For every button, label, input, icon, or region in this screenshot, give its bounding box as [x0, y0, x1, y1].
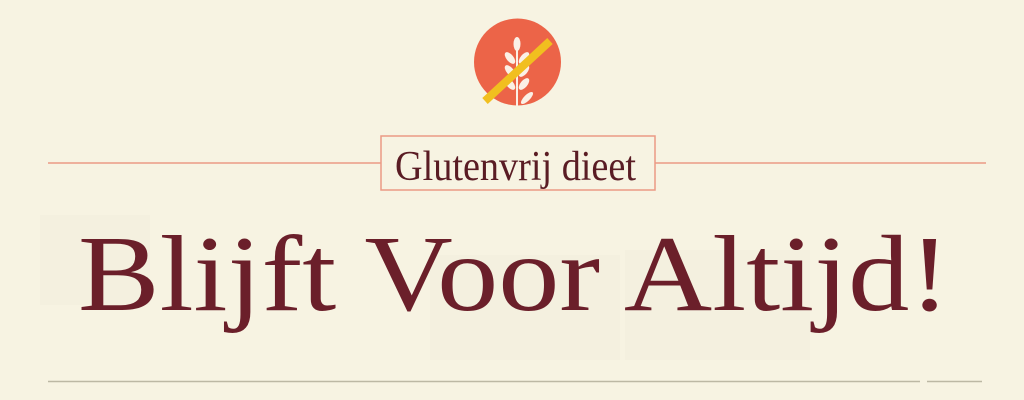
icon: no gluten [474, 18, 561, 106]
title: Blijft Voor Altijd! [78, 215, 950, 334]
subtitle box: Glutenvrij dieet [395, 144, 636, 190]
